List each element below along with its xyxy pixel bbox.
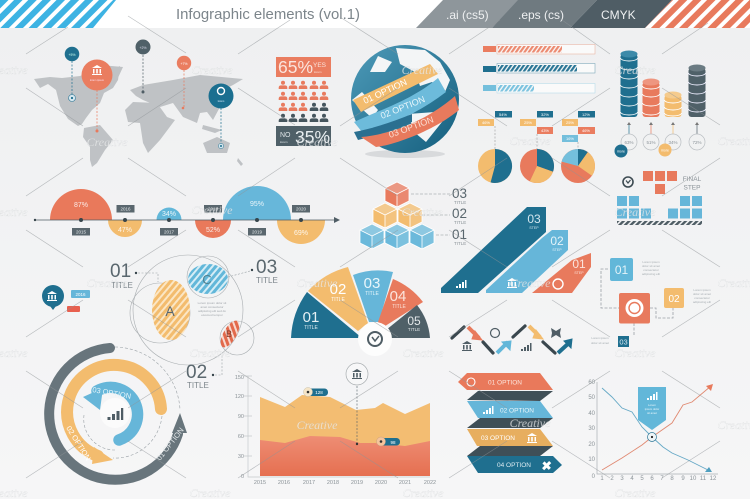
centre clock xyxy=(358,322,392,356)
header format tabs: CMYK xyxy=(601,8,636,22)
segment 02 xyxy=(308,267,368,331)
repeated watermark wordmarks: Creative xyxy=(192,203,233,217)
no box: NO xyxy=(280,132,291,139)
tags: 46% xyxy=(482,120,490,125)
pie 2 xyxy=(520,149,554,183)
venn text xyxy=(198,301,226,317)
pie 3 xyxy=(561,149,595,183)
repeated watermark wordmarks: Creative xyxy=(510,276,551,290)
repeated watermark wordmarks: Creative xyxy=(87,135,128,149)
axes: 150 xyxy=(235,375,244,381)
marker 128 xyxy=(304,388,328,396)
box 01: adipiscing elit xyxy=(642,272,660,276)
label 01: TITLE xyxy=(111,281,133,290)
tags: 46% xyxy=(582,128,590,133)
no box: lorem xyxy=(280,140,288,144)
segment 04: TITLE xyxy=(392,304,406,310)
percent labels: 87% xyxy=(74,202,88,209)
orange area xyxy=(260,436,430,476)
bar 3 xyxy=(483,84,595,93)
percent labels xyxy=(74,201,308,237)
segment 05: 05 xyxy=(407,314,421,328)
box 03: 03 xyxy=(619,338,628,346)
year tags: 2016 xyxy=(120,206,131,212)
segment 04 xyxy=(378,279,423,328)
year labels xyxy=(254,480,436,486)
pin: orange bank south america: lorem ipsum xyxy=(90,78,104,82)
segment 04: 04 xyxy=(390,288,406,305)
orange blocks xyxy=(643,171,677,194)
pin: small teal north america xyxy=(65,47,79,102)
step 02: 02 xyxy=(550,234,564,248)
axes: 60 xyxy=(238,434,244,440)
repeated watermark wordmarks: Creative xyxy=(615,63,656,77)
blue blocks xyxy=(617,196,702,218)
axes: 6 xyxy=(650,476,654,482)
small tag icon xyxy=(42,285,90,312)
cube labels: TITLE xyxy=(454,241,466,246)
tags: 25% xyxy=(566,120,574,125)
icons xyxy=(462,341,472,351)
arrows and percent circles: 51% xyxy=(646,140,656,145)
axes: 10 xyxy=(690,476,697,482)
line chart xyxy=(588,380,718,482)
axes: 40 xyxy=(588,411,596,417)
dashed guides xyxy=(84,347,180,458)
repeated watermark wordmarks: Creative xyxy=(615,205,656,219)
segment 01: 01 xyxy=(303,309,319,326)
final step label: STEP xyxy=(684,184,700,192)
flow diagram xyxy=(591,258,711,347)
arrows and percent circles: 34% xyxy=(668,140,678,145)
repeated watermark wordmarks: Creative xyxy=(403,346,444,360)
pin: teal target australia: lorem xyxy=(218,99,224,103)
step 01: STEP xyxy=(574,271,584,275)
label 03: TITLE xyxy=(256,276,278,285)
cube labels xyxy=(411,186,467,246)
box 01 xyxy=(610,258,660,281)
venn diagram xyxy=(110,255,278,390)
repeated watermark wordmarks: Creative xyxy=(297,418,338,432)
axes: 8 xyxy=(670,476,674,482)
no box xyxy=(276,126,331,147)
repeated watermark wordmarks: Creative xyxy=(402,205,443,219)
year labels: 2022 xyxy=(424,480,436,486)
repeated watermark wordmarks: Creative xyxy=(297,276,338,290)
yes box: YES xyxy=(313,62,327,69)
axes: 90 xyxy=(238,414,244,420)
option ribbons xyxy=(458,373,562,473)
axes: 9 xyxy=(681,476,685,482)
axes: 20 xyxy=(588,442,596,448)
repeated watermark wordmarks: Creative xyxy=(402,63,443,77)
axes: 30 xyxy=(238,454,244,460)
final step label: FINAL xyxy=(683,176,702,183)
axes xyxy=(235,375,430,480)
globe xyxy=(351,45,459,158)
centre icon xyxy=(100,398,130,428)
ribbon 03 option: 03 OPTION xyxy=(387,114,435,140)
marker 128: 128 xyxy=(315,390,323,395)
arrow yellow xyxy=(529,326,543,339)
people icons xyxy=(279,81,328,122)
axes: 7 xyxy=(660,476,664,482)
segment C: C xyxy=(202,272,212,287)
year labels: 2019 xyxy=(351,480,363,486)
top left stripes xyxy=(0,0,116,28)
step 01 xyxy=(532,253,591,293)
segment A xyxy=(152,280,190,340)
segment B: B xyxy=(226,329,232,339)
pin: teal target australia xyxy=(208,84,234,149)
outlines xyxy=(130,255,254,365)
repeated watermark wordmarks: Creative xyxy=(510,416,551,430)
box 01: Lorem ipsum xyxy=(642,260,660,264)
venn text: amet consectetur xyxy=(200,305,224,309)
pin: grey europe xyxy=(136,40,150,94)
repeated watermark wordmarks: Creative xyxy=(297,135,338,149)
axes: 5 xyxy=(640,476,644,482)
year tags: 2020 xyxy=(296,206,307,212)
tags: 43% xyxy=(541,128,549,133)
box 02: dolor sit amet xyxy=(693,292,711,296)
stack 1 xyxy=(620,50,638,117)
box 02: 02 xyxy=(668,294,680,305)
label 02 xyxy=(186,355,222,390)
wavy arrows xyxy=(452,326,572,353)
area chart xyxy=(235,363,436,486)
year tags: 2017 xyxy=(164,230,175,234)
marker 98 xyxy=(376,437,400,446)
segment 03: 03 xyxy=(364,275,380,292)
timeline xyxy=(34,186,340,244)
box 02: consectetur xyxy=(694,296,710,300)
label 01 xyxy=(110,261,158,290)
step 03: 03 xyxy=(527,212,541,226)
axes: 12 xyxy=(710,476,717,482)
option 04: 04 OPTION xyxy=(497,462,531,469)
axes: 10 xyxy=(588,457,596,463)
progress bars xyxy=(483,44,595,93)
axes: 0 xyxy=(592,474,596,480)
pie 1 xyxy=(478,149,512,183)
final step label xyxy=(683,176,702,192)
arrows and percent circles xyxy=(621,122,705,150)
box 03: Lorem ipsum xyxy=(591,336,609,340)
circular arrows xyxy=(49,347,187,480)
percent labels: 52% xyxy=(206,227,220,234)
arrow teal xyxy=(558,339,572,353)
repeated watermark wordmarks: Creative xyxy=(192,63,233,77)
step 02: STEP xyxy=(552,248,562,252)
box 02: adipiscing elit xyxy=(693,300,711,304)
label 01: 01 xyxy=(110,261,131,282)
step 02 xyxy=(486,230,568,293)
box 01: 01 xyxy=(615,263,628,277)
clock icon xyxy=(623,177,633,187)
year labels: 2018 xyxy=(327,480,339,486)
box 01: consectetur xyxy=(643,268,659,272)
pin: orange asia xyxy=(177,56,191,109)
top right stripes xyxy=(645,0,750,28)
continents xyxy=(34,65,243,167)
arrows and percent circles: 72% xyxy=(692,140,702,145)
tags: 25% xyxy=(524,120,532,125)
option 03: 03 OPTION xyxy=(481,435,515,442)
percent labels: 95% xyxy=(250,201,264,208)
step 03: STEP xyxy=(529,226,539,230)
coin stacks xyxy=(614,50,706,158)
repeated watermark wordmarks: Creative xyxy=(615,346,656,360)
small tag icon: 2016 xyxy=(75,292,86,297)
stack 4 xyxy=(688,64,706,117)
callout: sit amet xyxy=(647,411,657,415)
box 03: dolor sit amet xyxy=(591,341,609,345)
cube labels: 03 xyxy=(452,186,467,201)
final step blocks xyxy=(617,171,702,225)
more badges: more xyxy=(661,148,669,152)
tags: 54% xyxy=(499,112,507,117)
axes: 4 xyxy=(630,476,634,482)
box 01: dolor sit amet xyxy=(642,264,660,268)
axes: 60 xyxy=(588,380,596,386)
red line xyxy=(602,386,711,470)
segment B xyxy=(217,318,243,350)
option 02: 02 OPTION xyxy=(500,408,534,414)
arrows and percent circles: 63% xyxy=(624,140,634,145)
venn text: Lorem ipsum dolor sit xyxy=(198,301,226,305)
header format tabs xyxy=(416,0,672,28)
cube pyramid xyxy=(360,182,467,249)
axis line xyxy=(34,217,340,223)
venn text: eiusmod tempor xyxy=(201,313,223,317)
option 01: 01 OPTION xyxy=(488,380,522,386)
stack 3 xyxy=(664,92,682,117)
repeated watermark wordmarks: Creative xyxy=(190,346,231,360)
cube labels: TITLE xyxy=(454,200,466,205)
segment 01 xyxy=(291,292,362,338)
axes: 2 xyxy=(610,476,614,482)
year tags: 2015 xyxy=(76,230,87,234)
pie charts xyxy=(478,111,595,183)
cubes xyxy=(360,224,434,249)
bar 2 xyxy=(483,64,595,73)
no box: 35% xyxy=(295,127,330,147)
blue line xyxy=(602,388,708,470)
segment 05 xyxy=(386,305,430,338)
axes: 50 xyxy=(588,395,596,401)
box 02: Lorem ipsum xyxy=(693,288,711,292)
grey arrow 01 option: 01 OPTION xyxy=(154,426,186,462)
segment 02: 02 xyxy=(330,281,346,298)
header format tabs: .ai (cs5) xyxy=(446,8,489,22)
segment A: A xyxy=(165,303,175,319)
yes box: lorem xyxy=(314,70,322,74)
pin bank xyxy=(346,363,368,445)
segment 05: TITLE xyxy=(408,327,420,332)
segment C xyxy=(188,264,228,294)
step ribbons xyxy=(441,207,591,293)
axes: 0 xyxy=(241,474,244,480)
segment 01: TITLE xyxy=(304,325,318,331)
yellow arrow 02 option: 02 OPTION xyxy=(64,424,93,462)
axes: 30 xyxy=(588,426,596,432)
hatched base xyxy=(617,221,702,225)
percent labels: 47% xyxy=(118,227,132,234)
step 01: 01 xyxy=(572,257,586,271)
more badges: more xyxy=(617,150,625,154)
light blue arrow 03 option: 03 OPTION xyxy=(92,385,132,401)
label 02: TITLE xyxy=(187,381,209,390)
year labels: 2015 xyxy=(254,480,266,486)
axes: 1 xyxy=(600,476,604,482)
year labels: 2016 xyxy=(278,480,290,486)
pin: orange bank south america xyxy=(82,60,112,132)
box 02 xyxy=(664,288,711,308)
venn text: adipiscing elit sed do xyxy=(198,309,226,313)
world map xyxy=(34,40,243,167)
repeated watermark wordmarks: Creative xyxy=(510,134,551,148)
repeated watermark wordmarks: Creative xyxy=(87,276,128,290)
fan gauge xyxy=(291,267,430,356)
year tags xyxy=(72,205,310,236)
callout: ipsum dolor xyxy=(645,407,659,411)
year tags: 2019 xyxy=(252,230,263,234)
pin: orange asia: +7% xyxy=(180,62,188,66)
label 03 xyxy=(228,257,278,285)
header format tabs: .eps (cs) xyxy=(518,8,564,22)
globe with ribbons xyxy=(351,45,459,158)
title: Infographic elements (vol.1) xyxy=(176,7,360,23)
marker 98: 98 xyxy=(390,440,396,445)
year tags: 2018 xyxy=(208,206,219,212)
ribbon 01 option: 01 OPTION xyxy=(362,77,408,106)
bar 1 xyxy=(483,44,595,54)
more badges xyxy=(614,144,672,158)
percent labels: 69% xyxy=(294,230,308,237)
pin: small teal north america: +5% xyxy=(68,53,76,57)
box centre orange xyxy=(619,293,650,324)
dark folds xyxy=(467,391,553,456)
tags: 16% xyxy=(566,136,574,141)
tags xyxy=(478,111,595,142)
tags: 12% xyxy=(582,112,590,117)
callout xyxy=(638,387,666,430)
ribbon 02 option: 02 OPTION xyxy=(379,94,426,121)
cube labels: 02 xyxy=(452,206,467,221)
percent labels: 34% xyxy=(162,211,176,218)
stack 2 xyxy=(642,78,660,117)
cube labels: TITLE xyxy=(454,220,466,225)
axes: 3 xyxy=(620,476,624,482)
label 02: 02 xyxy=(186,362,207,383)
poll panel xyxy=(276,57,331,147)
segment 02: TITLE xyxy=(331,297,345,303)
year labels: 2020 xyxy=(375,480,387,486)
axes: 120 xyxy=(235,394,244,400)
year labels: 2017 xyxy=(303,480,315,486)
step 03 xyxy=(441,207,546,293)
callout: Lorem xyxy=(648,403,657,407)
crossing marker xyxy=(648,432,656,442)
label 03: 03 xyxy=(256,257,277,278)
pin: grey europe: +2% xyxy=(139,46,147,50)
segment 03: TITLE xyxy=(365,291,379,297)
year labels: 2021 xyxy=(399,480,411,486)
cube labels: 01 xyxy=(452,227,467,242)
segment 03 xyxy=(353,270,393,322)
arrow light blue xyxy=(497,341,511,353)
axes: 11 xyxy=(700,476,707,482)
arrow orange xyxy=(468,327,482,340)
yes box xyxy=(276,57,331,77)
axes xyxy=(588,380,718,482)
yes box: 65% xyxy=(278,57,313,77)
yellow area xyxy=(260,395,430,476)
tags: 32% xyxy=(541,112,549,117)
half circles xyxy=(50,186,325,244)
box 03 xyxy=(591,336,629,347)
